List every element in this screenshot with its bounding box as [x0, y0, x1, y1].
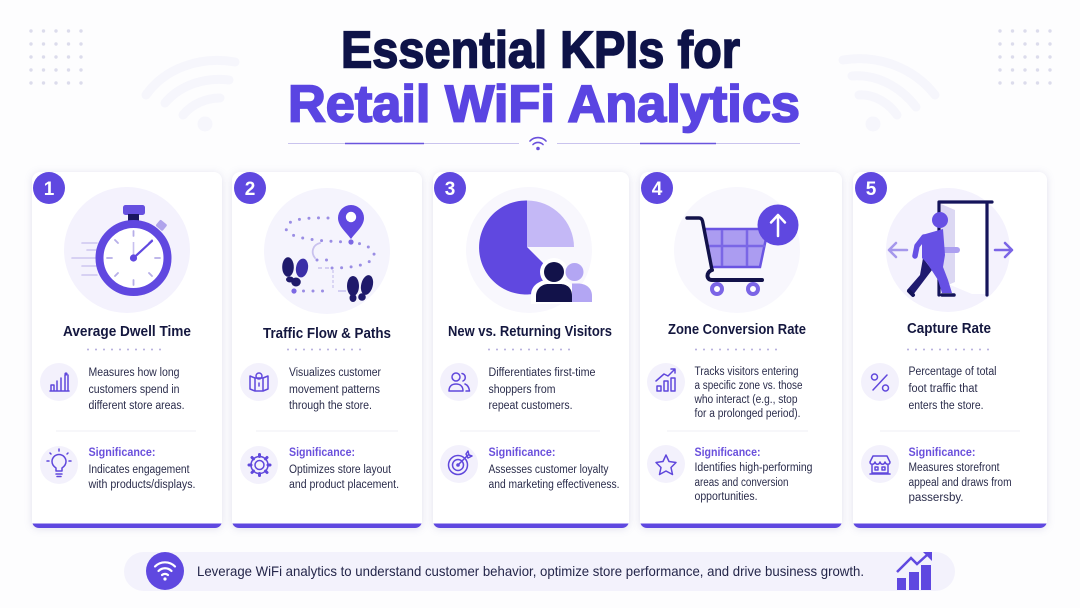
icon: map	[240, 363, 278, 401]
significance: opportunities.	[694, 491, 758, 503]
heading: Average Dwell Time	[63, 324, 191, 340]
significance: and marketing effectiveness.	[488, 479, 620, 491]
description: a specific zone vs. those	[694, 380, 802, 392]
arrow: left	[889, 243, 907, 257]
panel: card 1 average dwell time	[32, 172, 222, 528]
icon: star	[647, 445, 685, 483]
dotted divider	[908, 348, 990, 350]
title: Retail WiFi Analytics	[288, 76, 800, 134]
panel: card 3 new vs returning visitors	[433, 172, 629, 528]
description: Tracks visitors entering	[694, 366, 798, 378]
icon: percent	[861, 363, 899, 401]
icon: target	[440, 445, 478, 483]
description: Measures how long	[88, 367, 180, 379]
significance: Indicates engagement	[88, 464, 190, 476]
significance: Optimizes store layout	[289, 464, 392, 476]
description: who interact (e.g., stop	[694, 394, 798, 406]
illustration: pie chart with people	[466, 187, 592, 313]
card 5 background	[853, 172, 1047, 528]
illustration: stopwatch	[64, 187, 190, 313]
significance: Significance:	[694, 447, 760, 459]
significance: appeal and draws from	[908, 477, 1012, 489]
dot grid: top right	[998, 29, 1052, 85]
number badge 3	[434, 172, 466, 204]
significance: areas and conversion	[694, 477, 788, 489]
number badge 5	[855, 172, 887, 204]
title divider with wifi icon	[288, 138, 800, 150]
description: different store areas.	[88, 400, 184, 412]
dotted divider	[696, 348, 778, 350]
illustration: shopping cart with arrow	[674, 187, 800, 313]
heading: Zone Conversion Rate	[668, 322, 806, 338]
significance: with products/displays.	[88, 479, 196, 491]
significance: and product placement.	[289, 479, 399, 491]
illustration: path and footprints	[264, 188, 390, 314]
significance	[694, 447, 812, 503]
description	[694, 366, 802, 420]
icon: growth chart	[897, 552, 932, 590]
significance	[289, 447, 399, 491]
title: Essential KPIs for	[341, 22, 740, 80]
description: for a prolonged period).	[694, 408, 800, 420]
dotted divider	[288, 348, 368, 350]
description: enters the store.	[908, 400, 984, 412]
icon: wifi circle	[146, 552, 184, 590]
description	[88, 367, 184, 412]
significance	[88, 447, 196, 491]
heading: Capture Rate	[907, 321, 991, 337]
icon: faint wifi watermark left	[146, 60, 235, 127]
panel: card 4 zone conversion rate	[640, 172, 842, 528]
title	[288, 22, 800, 134]
heading: Traffic Flow & Paths	[263, 326, 391, 342]
significance	[488, 447, 620, 491]
dotted divider	[88, 348, 168, 350]
description: through the store.	[289, 400, 372, 412]
panel: card 2 traffic flow and paths	[232, 172, 422, 528]
number badge 2	[234, 172, 266, 204]
dot grid: top left	[29, 29, 83, 85]
footer banner	[124, 552, 955, 591]
icon: growth chart	[647, 363, 685, 401]
significance: Significance:	[88, 447, 156, 459]
card 1 background	[32, 172, 222, 528]
banner text: Leverage WiFi analytics to understand customer behavior, optimize store performance, and drive business growth.	[197, 563, 864, 579]
description: Differentiates first-time	[488, 367, 596, 379]
heading: New vs. Returning Visitors	[448, 324, 612, 340]
dotted divider	[489, 348, 570, 350]
description: foot traffic that	[908, 383, 978, 395]
card 3 background	[433, 172, 629, 528]
description: shoppers from	[488, 384, 556, 396]
icon: storefront	[861, 445, 899, 483]
significance: Significance:	[488, 447, 556, 459]
icon: people	[440, 363, 478, 401]
significance	[908, 447, 1012, 504]
icon: faint wifi watermark right	[843, 59, 935, 127]
description: Percentage of total	[908, 366, 996, 378]
number badge 2: 2	[245, 179, 255, 200]
number badge 5: 5	[866, 179, 877, 200]
card 2 background	[232, 172, 422, 528]
significance: Significance:	[289, 447, 355, 459]
description: movement patterns	[289, 384, 380, 396]
number badge 3: 3	[445, 179, 455, 200]
number badge 1	[33, 172, 65, 204]
significance: Measures storefront	[908, 462, 1000, 474]
description	[488, 367, 596, 412]
description: repeat customers.	[488, 400, 572, 412]
arrow: right	[995, 243, 1012, 257]
description: Visualizes customer	[289, 367, 381, 379]
number badge 1: 1	[44, 179, 55, 200]
significance: Assesses customer loyalty	[488, 464, 609, 476]
description	[908, 366, 996, 412]
icon: gear	[240, 446, 278, 484]
icon: light bulb	[40, 446, 78, 484]
significance: Identifies high-performing	[694, 462, 812, 474]
card 4 background	[640, 172, 842, 528]
number badge 4: 4	[652, 179, 663, 200]
number badge 4	[641, 172, 673, 204]
description	[289, 367, 381, 412]
illustration: person entering door	[886, 188, 1010, 312]
significance: Significance:	[908, 447, 976, 459]
significance: passersby.	[908, 492, 964, 504]
icon: bar chart	[40, 363, 78, 401]
description: customers spend in	[88, 384, 180, 396]
panel: card 5 capture rate	[853, 172, 1047, 528]
